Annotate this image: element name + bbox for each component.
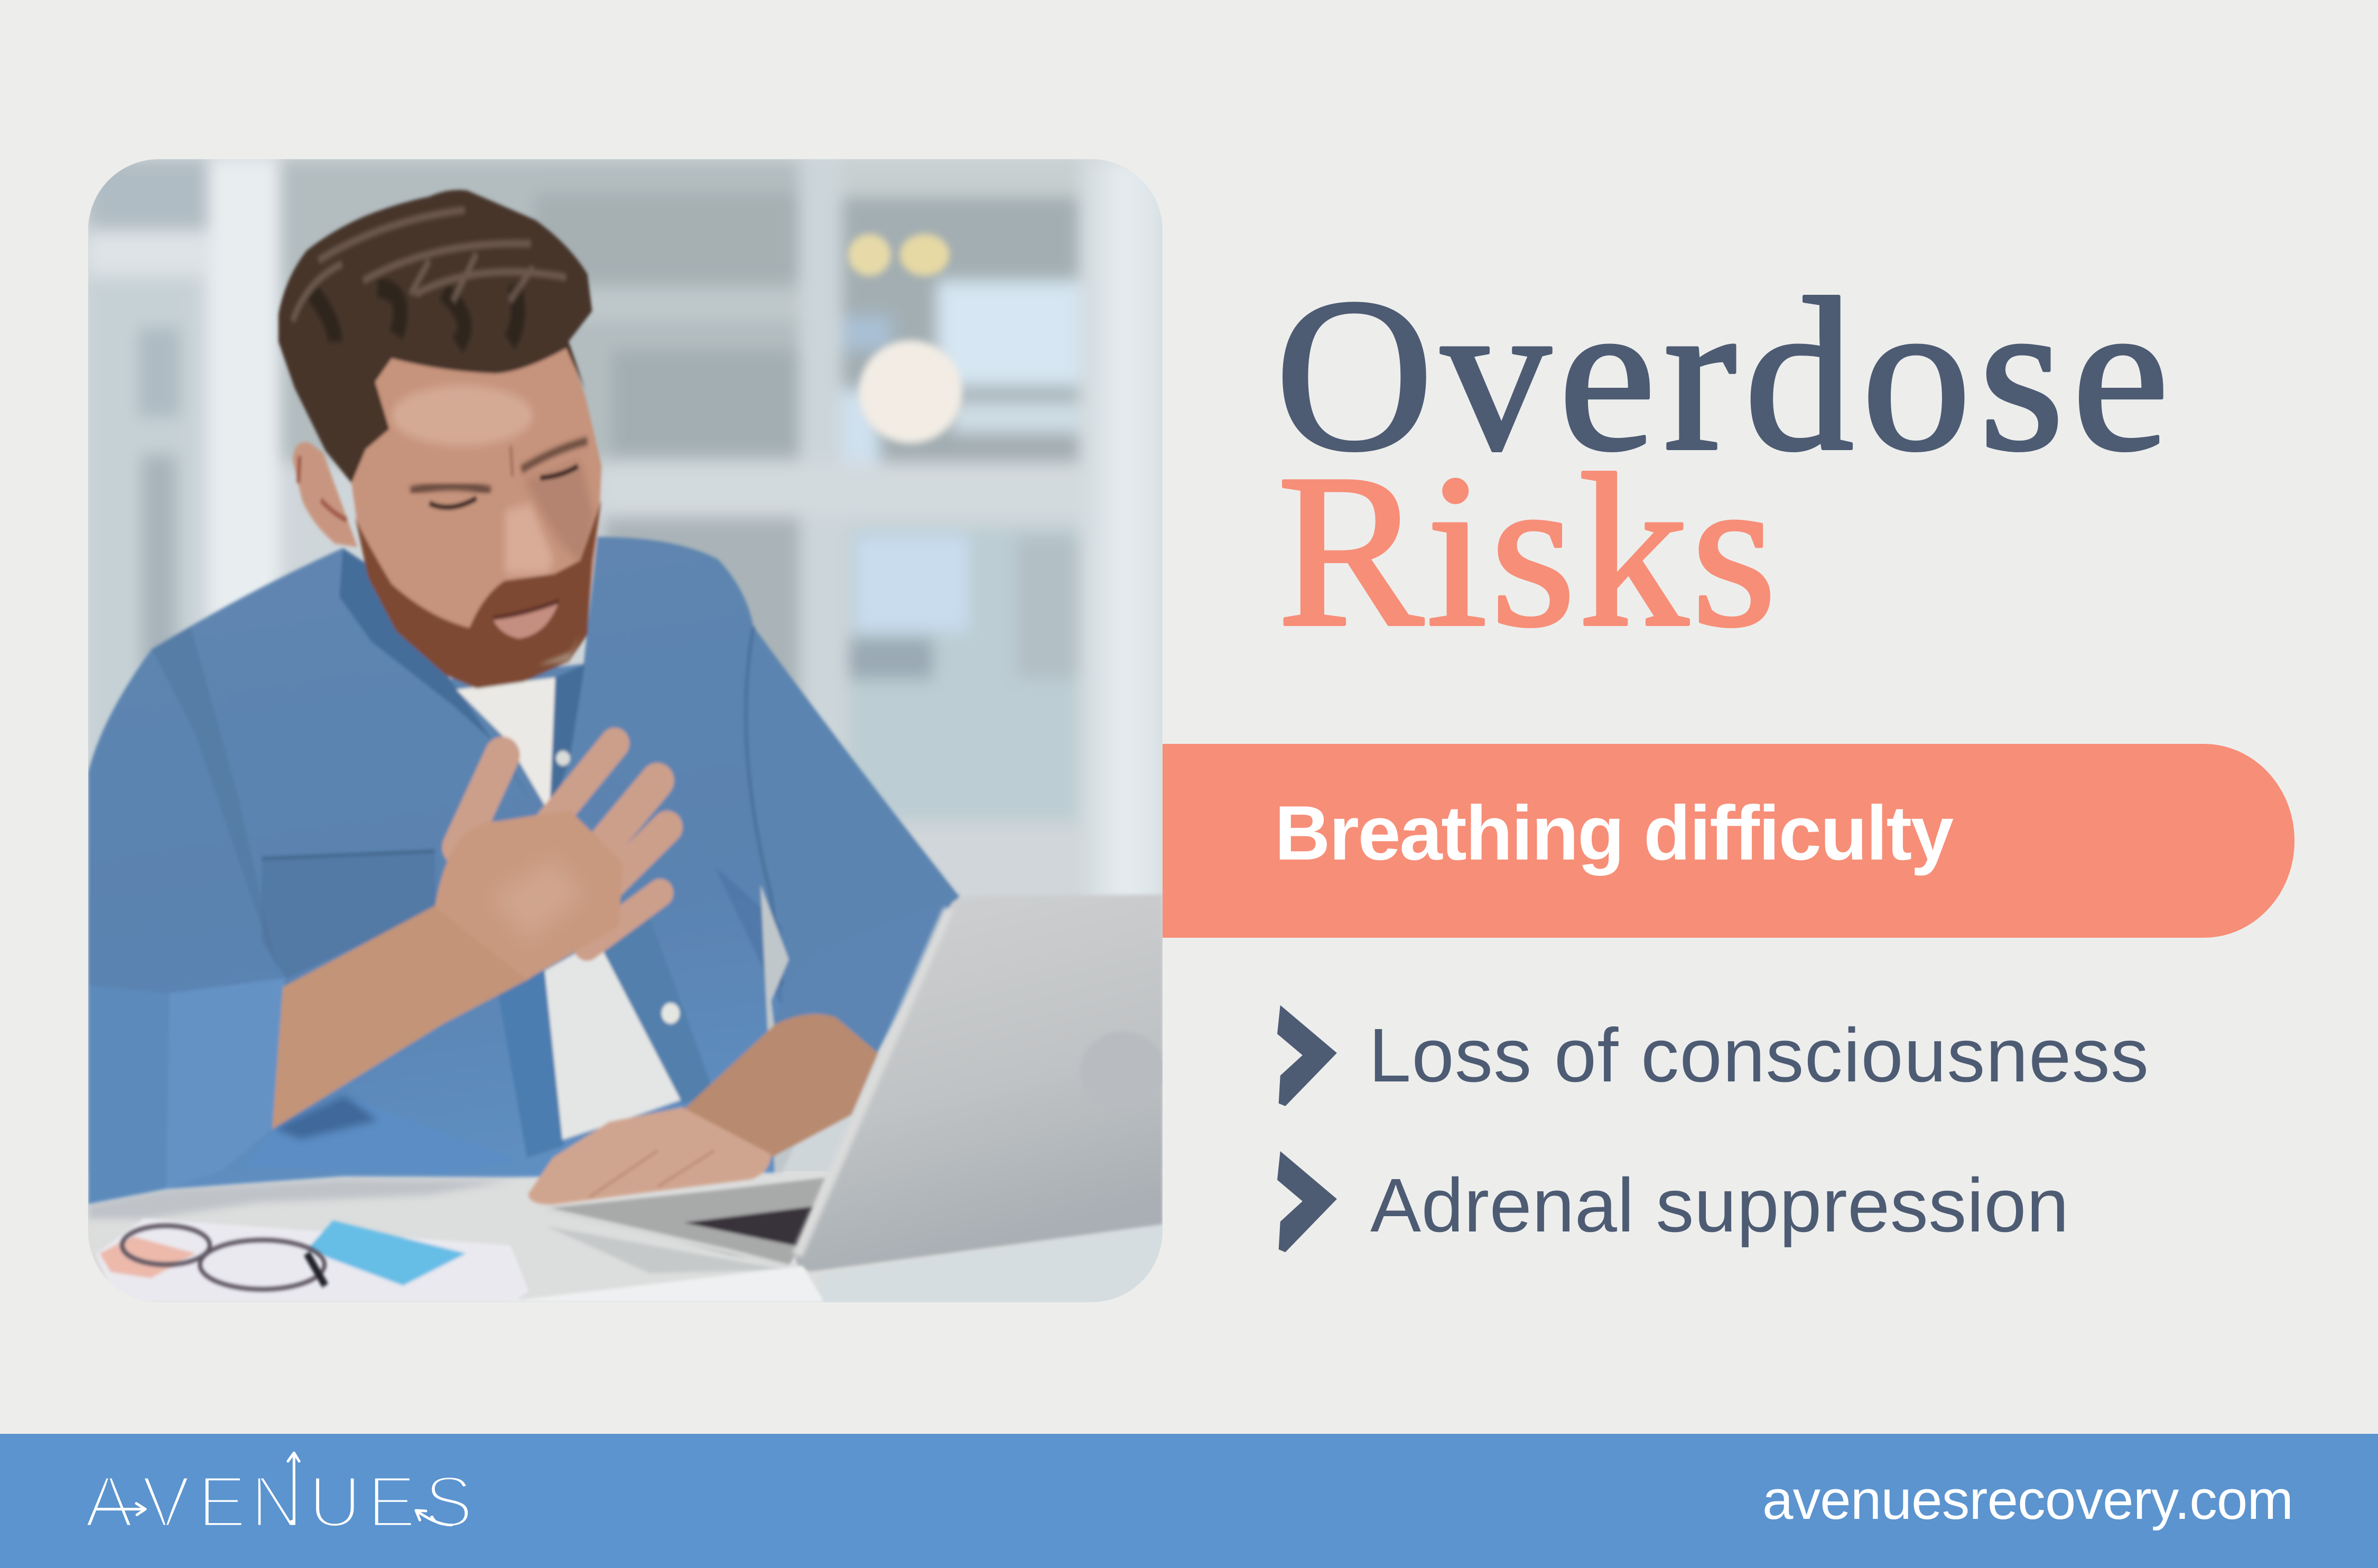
laptop: [546, 894, 1165, 1305]
desk: [88, 1171, 872, 1299]
person: [88, 190, 1165, 1305]
icon: chevron: [1277, 1151, 1337, 1252]
photo: man with hand on chest at laptop: [74, 148, 1184, 1321]
office window background: [88, 159, 1163, 1171]
shirt: [88, 537, 959, 1204]
desk front right: [820, 1225, 1163, 1305]
highlighted pill: Breathing difficulty: [1163, 744, 2295, 938]
face: [351, 345, 601, 634]
gap behind right arm: [758, 885, 793, 1174]
brows and eyes: [411, 486, 491, 491]
list item: Adrenal suppression: Adrenal suppression: [1370, 1163, 2069, 1248]
icon: chevron: [1277, 1005, 1337, 1106]
title line: Risks: Risks: [1277, 429, 1777, 672]
raised forearm and hand: [272, 743, 667, 1130]
website url: avenuesrecovery.com: [1762, 1469, 2293, 1531]
beard: [355, 500, 601, 688]
logo: AVENUES with arrows: AVENUES: [85, 1461, 473, 1543]
eyeglasses: [122, 1226, 325, 1290]
list item: Loss of consciousness: Loss of consciousness: [1369, 1013, 2149, 1098]
white undershirt: [456, 677, 683, 1140]
title line: Overdose: Overdose: [1275, 253, 2169, 496]
ceiling lights: [848, 234, 962, 443]
footer bar: [0, 1434, 2378, 1568]
mouth: [493, 601, 559, 639]
hair: [278, 190, 592, 483]
shirt placket and buttons: [550, 664, 714, 1104]
right arm, cuff and resting hand: [528, 894, 961, 1205]
papers and blue note: [96, 1218, 824, 1302]
head: [278, 190, 601, 688]
title: [1275, 253, 2169, 672]
ear: [293, 442, 357, 547]
highlighted pill: Breathing difficulty: Breathing difficulty: [1275, 790, 1954, 876]
